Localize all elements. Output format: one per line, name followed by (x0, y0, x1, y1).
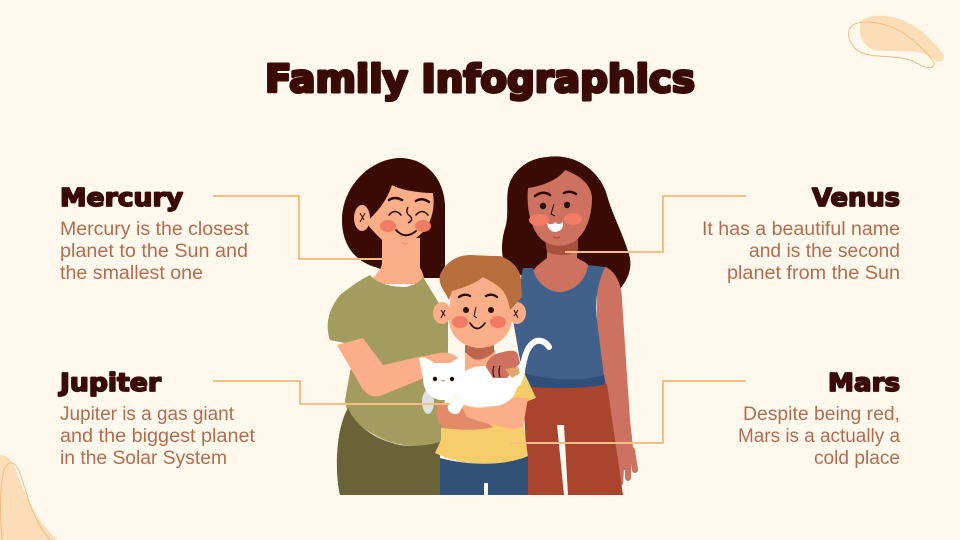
title: Family Infographics (265, 57, 695, 101)
text block: Mercury: the smallest one (60, 263, 203, 284)
text block: Jupiter (60, 404, 256, 469)
panel: Mars (738, 368, 900, 469)
heading: Mars: Mars (828, 368, 900, 397)
text block: Jupiter: in the Solar System (60, 448, 227, 469)
heading: Jupiter: Jupiter (58, 368, 162, 397)
text block: Mars: cold place (814, 448, 900, 469)
figure: mother on the right (502, 156, 635, 495)
text block: Mars: Despite being red, (743, 404, 900, 425)
panel: Venus (702, 183, 900, 284)
panel: Mercury (60, 183, 250, 284)
heading: Venus: Venus (812, 183, 900, 212)
text block: Mars: Mars is a actually a (738, 426, 900, 447)
connector: Jupiter (213, 381, 450, 404)
trouser gap (484, 483, 488, 495)
icon: white cat (419, 341, 549, 414)
text block: Venus: planet from the Sun (727, 263, 900, 284)
connector: Venus (565, 196, 746, 252)
heading: Mercury: Mercury (60, 183, 183, 212)
text block: Jupiter: and the biggest planet (60, 426, 256, 447)
text block: Jupiter: Jupiter is a gas giant (60, 404, 235, 425)
text block: Venus: It has a beautiful name (702, 219, 900, 240)
text block: Venus: and is the second (749, 241, 900, 262)
figure: boy with cat (419, 255, 549, 495)
trouser gap (557, 425, 568, 495)
mother's hand on the boy (486, 351, 520, 378)
yellow shirt (435, 420, 528, 464)
arm and hand (597, 267, 633, 470)
text block: Venus (702, 219, 900, 284)
connector: Mars (510, 381, 746, 443)
panel: Jupiter (58, 368, 256, 469)
figure: mother on the left (328, 158, 458, 495)
text block: Mercury: planet to the Sun and (60, 241, 248, 262)
decorative blob: bottom left (0, 455, 58, 540)
connector: Mercury (213, 196, 385, 259)
text block: Mercury (60, 219, 250, 284)
text block: Mars (738, 404, 900, 469)
text block: Mercury: Mercury is the closest (60, 219, 250, 240)
decorative blob: top right (849, 16, 944, 68)
illustration: family (328, 156, 635, 495)
